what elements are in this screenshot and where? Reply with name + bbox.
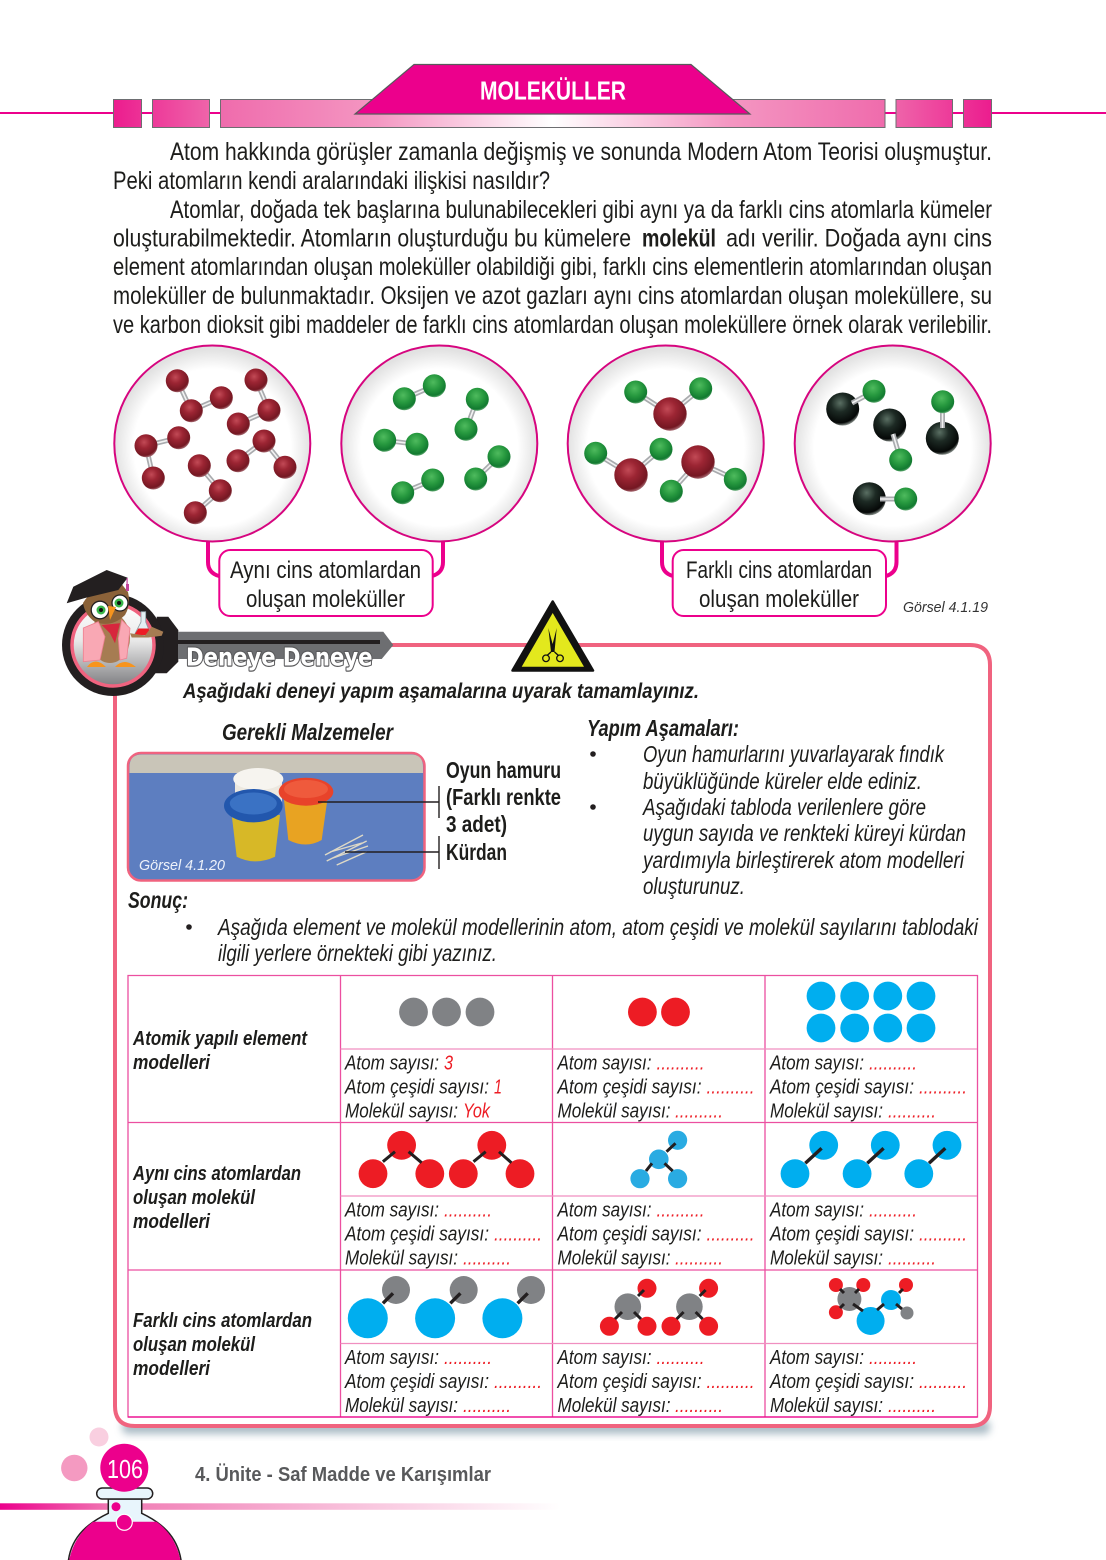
bracket: same-type molecules	[208, 541, 443, 576]
row 3 cell texts: ..........	[444, 1346, 492, 1369]
material labels: (Farklı renkte	[446, 784, 561, 810]
row heading: atomic elements: Atomik yapılı element	[132, 1027, 308, 1050]
row 3 cell texts: Atom sayısı:	[556, 1346, 652, 1369]
row heading: same-type molecules: Aynı cins atomlardan	[132, 1162, 301, 1185]
row 3 cell texts: ..........	[706, 1370, 754, 1393]
procedure steps: Yapım Aşamaları:	[587, 715, 739, 741]
caption: figure 4.1.19: Görsel 4.1.19	[903, 600, 988, 616]
row 1 cell texts: Molekül sayısı:	[345, 1100, 458, 1122]
row 3 cell texts: Atom çeşidi sayısı:	[556, 1370, 702, 1393]
row 2 cell texts: ..........	[675, 1246, 723, 1270]
panel: experiment	[115, 645, 990, 1426]
row 3 cell texts: Molekül sayısı:	[558, 1394, 670, 1417]
row 1 cell texts: ..........	[888, 1100, 936, 1122]
row heading: same-type molecules: modelleri	[133, 1210, 211, 1233]
material labels	[446, 757, 561, 865]
label: different-type atoms: Farklı cins atomlardan	[686, 557, 872, 584]
row 3 cell texts: ..........	[888, 1394, 936, 1417]
row 1 cell texts: Atom sayısı:	[768, 1052, 864, 1074]
owl tie	[102, 623, 120, 643]
model: three gray atoms	[399, 998, 494, 1026]
flask body	[68, 1499, 181, 1560]
page number: 106	[107, 1454, 143, 1484]
toothpicks	[325, 835, 368, 865]
row 1 cell texts: Atom çeşidi sayısı:	[343, 1076, 489, 1098]
header banner	[0, 64, 1106, 128]
row 1 cell texts: Molekül sayısı:	[558, 1100, 670, 1122]
caption: figure 4.1.20: Görsel 4.1.20	[139, 858, 225, 874]
row 2 cell texts: ..........	[888, 1246, 936, 1270]
ribbon heading: Deneye Deneye	[186, 643, 372, 672]
row 3 cell texts: Atom çeşidi sayısı:	[768, 1370, 914, 1393]
section ribbon	[155, 617, 393, 673]
label: same-type atoms	[219, 550, 433, 616]
owl feet	[87, 662, 136, 667]
materials photo	[128, 753, 424, 880]
owl body	[90, 613, 130, 663]
row heading: same-type molecules	[132, 1162, 301, 1233]
row 3 cell texts: ..........	[463, 1394, 511, 1417]
owl cap	[67, 570, 129, 603]
material labels: Kürdan	[446, 839, 507, 865]
procedure steps	[587, 715, 966, 899]
row 3 cell texts: Atom sayısı:	[343, 1346, 439, 1369]
row 2 cell texts: Molekül sayısı:	[558, 1246, 670, 1270]
label: same-type atoms: oluşan moleküller	[246, 586, 405, 613]
row 1 cell texts: Atom çeşidi sayısı:	[768, 1076, 914, 1098]
procedure steps: uygun sayıda ve renkteki küreyi kürdan	[643, 820, 966, 846]
procedure steps: oluşturunuz.	[643, 873, 745, 899]
row heading: different-type molecules: oluşan molekül	[133, 1333, 256, 1356]
row 2 cell texts: Atom sayısı:	[343, 1198, 439, 1222]
row 3 cell texts: ..........	[494, 1370, 542, 1393]
intro text block	[113, 138, 992, 339]
row 3 cell texts: ..........	[869, 1346, 917, 1369]
intro text block: molekül	[642, 224, 716, 252]
row heading: atomic elements: modelleri	[133, 1051, 211, 1074]
instruction line: Aşağıdaki deneyi yapım aşamalarına uyarak tamamlayınız.	[182, 679, 699, 703]
label: different-type atoms: oluşan moleküller	[699, 586, 859, 613]
intro text block: Peki atomların kendi aralarındaki ilişkisi nasıldır?	[113, 167, 550, 195]
row 2 cell texts: ..........	[656, 1198, 704, 1222]
row 1 cell texts: ..........	[869, 1052, 917, 1074]
owl coat	[83, 620, 130, 662]
procedure steps: yardımıyla birleştirerek atom modelleri	[641, 847, 965, 873]
model: two gray-red molecules	[600, 1279, 718, 1336]
procedure steps: büyüklüğünde küreler elde ediniz.	[643, 768, 922, 794]
row 2 cell texts: Atom çeşidi sayısı:	[768, 1222, 914, 1246]
row 2 cell texts: ..........	[919, 1222, 967, 1246]
row 2 cell texts: Atom sayısı:	[556, 1198, 652, 1222]
white pot	[233, 768, 283, 806]
model: three blue-gray molecules	[348, 1276, 545, 1338]
circle: black-green molecules	[795, 346, 991, 542]
panel shadow	[122, 1420, 990, 1434]
row heading: atomic elements	[132, 1027, 308, 1074]
pointer: play dough	[318, 786, 439, 818]
row 2 cell texts: ..........	[444, 1198, 492, 1222]
row 1 cell texts: ..........	[656, 1052, 704, 1074]
intro text block: oluşturabilmektedir. Atomların oluşturduğu bu kümelere	[113, 224, 631, 252]
owl glasses	[91, 595, 128, 619]
circle: red diatomic and triatomic molecules	[114, 346, 310, 542]
model: mixed molecule	[829, 1278, 914, 1335]
row 1 cell texts: Yok	[463, 1100, 491, 1122]
row 1 cell texts: Molekül sayısı:	[770, 1100, 883, 1122]
row 2 cell texts: Atom çeşidi sayısı:	[556, 1222, 702, 1246]
row heading: different-type molecules: modelleri	[133, 1357, 211, 1380]
row 2 cell texts: Molekül sayısı:	[770, 1246, 883, 1270]
red pot	[279, 778, 333, 844]
row 3 cell texts: Atom sayısı:	[768, 1346, 864, 1369]
pointer: toothpick	[345, 836, 439, 869]
row 1 cell texts: 3	[444, 1052, 453, 1074]
row 2 cell texts: ..........	[869, 1198, 917, 1222]
intro text block: adı verilir. Doğada aynı cins	[726, 224, 992, 252]
circle: green diatomic molecules	[341, 346, 537, 542]
owl head	[83, 582, 129, 624]
row 2 cell texts	[343, 1198, 967, 1270]
blue pot	[224, 789, 283, 861]
row 1 cell texts: 1	[494, 1076, 502, 1098]
row 3 cell texts: Molekül sayısı:	[770, 1394, 883, 1417]
row 2 cell texts: ..........	[706, 1222, 754, 1246]
row 1 cell texts: ..........	[919, 1076, 967, 1098]
row heading: same-type molecules: oluşan molekül	[133, 1186, 256, 1209]
warning sign	[512, 602, 593, 670]
row 1 cell texts: ..........	[706, 1076, 754, 1098]
procedure steps: Oyun hamurlarını yuvarlayarak fındık	[643, 741, 945, 767]
table grid	[128, 975, 978, 1417]
model: two red atoms	[628, 998, 690, 1026]
flask	[134, 612, 151, 635]
circle: red-green water-like molecules	[568, 346, 764, 542]
owl hand	[130, 627, 163, 638]
bracket: different-type molecules	[662, 541, 896, 576]
label: same-type atoms: Aynı cins atomlardan	[230, 557, 421, 584]
result text	[128, 887, 979, 966]
row 3 cell texts	[343, 1346, 967, 1417]
materials heading: Gerekli Malzemeler	[222, 719, 394, 745]
row 1 cell texts: Atom sayısı:	[556, 1052, 652, 1074]
procedure steps: Aşağıdaki tabloda verilenlere göre	[641, 794, 926, 820]
row 2 cell texts: ..........	[494, 1222, 542, 1246]
footer stripe	[0, 1503, 560, 1510]
footer flask with page number	[61, 1428, 181, 1560]
row 1 cell texts: Atom çeşidi sayısı:	[556, 1076, 702, 1098]
row heading: different-type molecules: Farklı cins atomlardan	[133, 1309, 312, 1332]
row 3 cell texts: Molekül sayısı:	[345, 1394, 458, 1417]
model: three blue diatomic molecules	[781, 1131, 961, 1188]
owl beak	[108, 606, 116, 620]
row 2 cell texts: Atom sayısı:	[768, 1198, 864, 1222]
row 2 cell texts: Molekül sayısı:	[345, 1246, 458, 1270]
model: four-atom blue molecule	[630, 1131, 687, 1188]
unit title: 4. Ünite - Saf Madde ve Karışımlar	[195, 1463, 491, 1486]
result text: Sonuç:	[128, 887, 188, 913]
row 3 cell texts: ..........	[656, 1346, 704, 1369]
row 2 cell texts: Atom çeşidi sayısı:	[343, 1222, 489, 1246]
model: eight blue atoms	[807, 982, 935, 1042]
row 3 cell texts: Atom çeşidi sayısı:	[343, 1370, 489, 1393]
row 1 cell texts: ..........	[675, 1100, 723, 1122]
row 1 cell texts: Atom sayısı:	[343, 1052, 439, 1074]
row 3 cell texts: ..........	[919, 1370, 967, 1393]
result text: ilgili yerlere örnekteki gibi yazınız.	[218, 940, 497, 966]
material labels: Oyun hamuru	[446, 757, 561, 783]
row 3 cell texts: ..........	[675, 1394, 723, 1417]
owl badge	[62, 570, 164, 696]
row 2 cell texts: ..........	[463, 1246, 511, 1270]
row 1 cell texts	[343, 1052, 967, 1122]
row heading: different-type molecules	[133, 1309, 312, 1380]
scissors icon	[543, 628, 563, 662]
material labels: 3 adet)	[446, 811, 507, 837]
title: MOLEKÜLLER	[480, 76, 626, 106]
model: two red triatomic molecules	[359, 1131, 534, 1188]
label: different-type atoms	[673, 550, 886, 616]
